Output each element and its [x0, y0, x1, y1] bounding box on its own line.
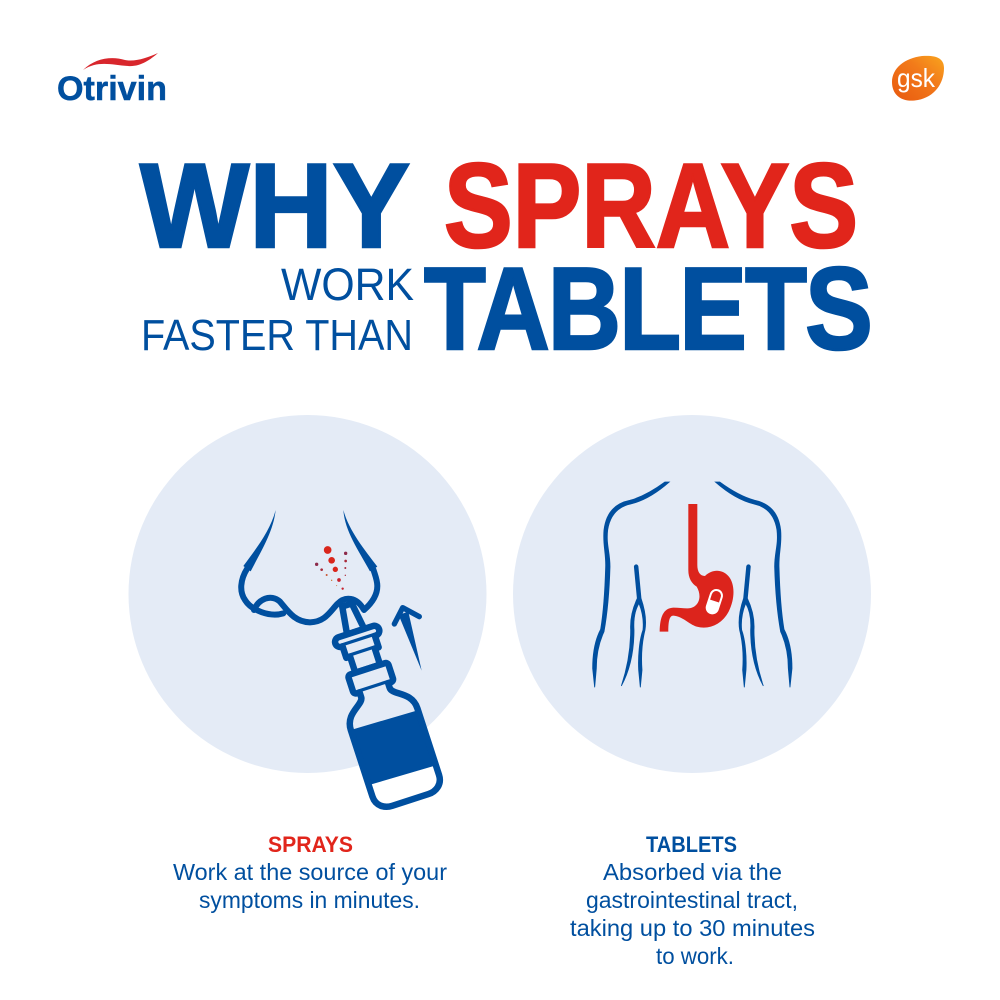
logo: Otrivin [57, 53, 167, 108]
icon: nose [241, 510, 377, 622]
title [140, 139, 871, 374]
icon: torso outline [593, 482, 792, 687]
caption heading: TABLETS: TABLETS [646, 832, 737, 857]
title word: TABLETS: TABLETS [424, 243, 871, 374]
icon: spray droplets [315, 546, 347, 590]
title words: FASTER THAN: FASTER THAN [141, 311, 413, 360]
icon: stomach with tablet [660, 504, 733, 632]
logo: Otrivin: Otrivin [57, 70, 167, 108]
caption body line 4: to work. [656, 943, 734, 969]
title word: WHY: WHY [140, 139, 410, 273]
logo: GSK: gsk [897, 63, 936, 93]
text block: sprays caption [173, 832, 447, 913]
caption body line 1: Work at the source of your [173, 859, 447, 885]
panel: tablets circle [513, 415, 871, 773]
caption body line 1: Absorbed via the [603, 859, 782, 885]
icon: upward arrow [394, 608, 422, 671]
caption body line 2: gastrointestinal tract, [586, 887, 798, 913]
logo: GSK [892, 56, 944, 101]
icon: nasal spray bottle [314, 594, 444, 811]
title words: WORK: WORK [281, 259, 414, 310]
caption heading: SPRAYS: SPRAYS [268, 832, 353, 857]
title word: SPRAYS: SPRAYS [444, 139, 858, 273]
panel: sprays circle [128, 415, 486, 773]
text block: tablets caption [570, 832, 815, 969]
caption body line 2: symptoms in minutes. [199, 887, 420, 913]
caption body line 3: taking up to 30 minutes [570, 915, 815, 941]
